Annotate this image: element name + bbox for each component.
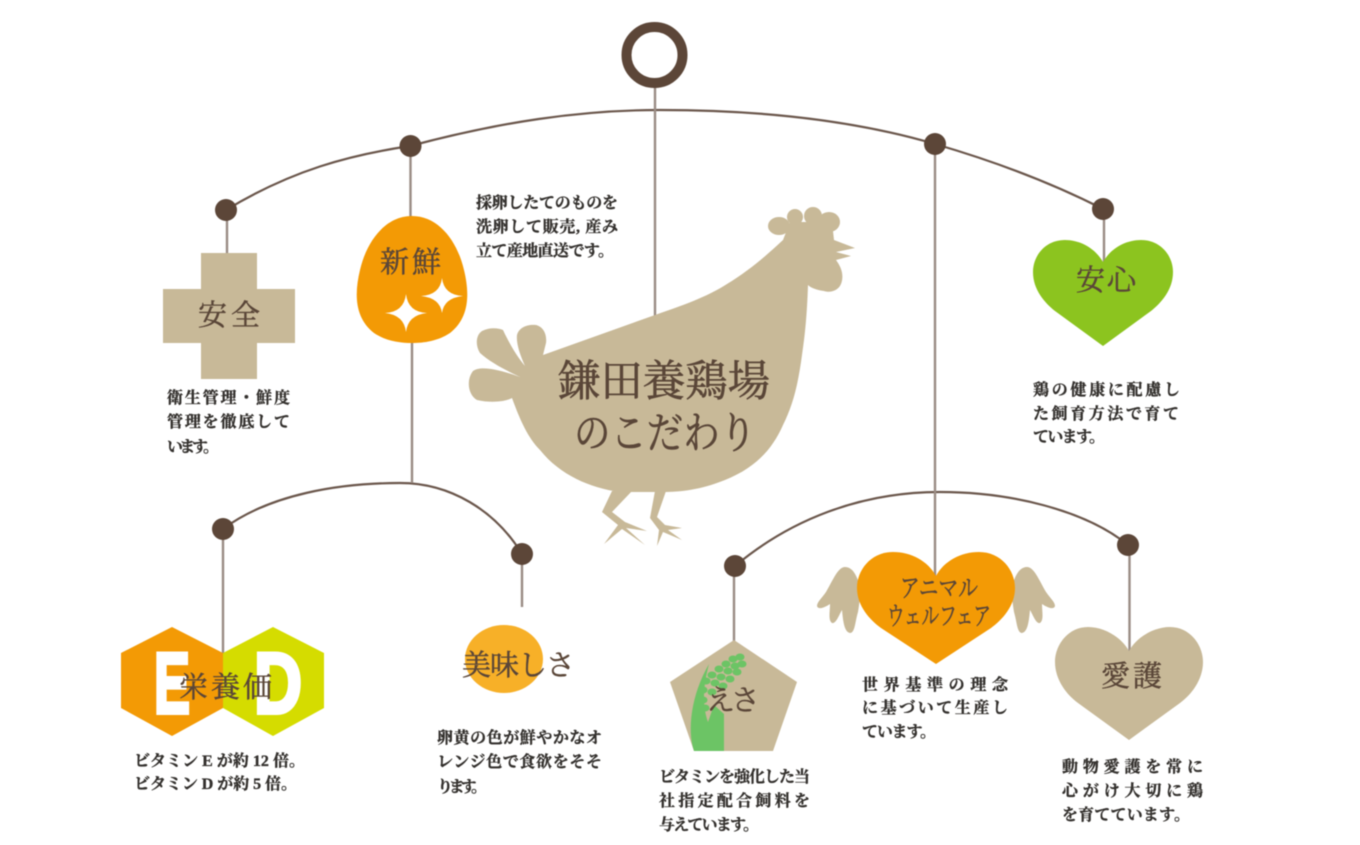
taste description [437, 728, 602, 796]
welfare label: ウェルフェア [887, 602, 991, 631]
welfare label: アニマル [900, 574, 978, 603]
freshness description [476, 193, 618, 260]
item: animal care heart [1055, 627, 1203, 824]
care description [1062, 757, 1203, 824]
freshness description: 立て産地直送です。 [476, 241, 614, 260]
feed description [659, 767, 810, 834]
welfare label [887, 574, 991, 631]
yellow circle [465, 625, 543, 693]
welfare description: に基づいて生産し [862, 698, 1008, 717]
wings [817, 567, 1055, 633]
safety label: 安全 [198, 299, 260, 332]
green heart [1033, 240, 1173, 346]
cross shape [163, 253, 295, 379]
chicken title: のこだわり [574, 411, 756, 458]
taste description: ります。 [437, 778, 487, 796]
feed description: 社指定配合飼料を [659, 791, 810, 810]
item: feed pentagon [659, 640, 810, 834]
pentagon [670, 640, 797, 751]
orange heart [857, 552, 1015, 664]
sparkles [385, 278, 463, 332]
welfare description [862, 675, 1009, 741]
egg shape [357, 216, 467, 343]
freshness description: 洗卵して販売, 産み [476, 217, 618, 236]
care description: 心がけ大切に鶏 [1062, 782, 1203, 800]
peace of mind description: 鶏の健康に配慮し [1033, 380, 1180, 399]
chicken silhouette [469, 207, 855, 546]
safety description: 管理を徹底して [167, 412, 290, 431]
care description: 動物愛護を常に [1062, 757, 1203, 776]
rice plant [691, 654, 746, 751]
orange hexagon [121, 627, 223, 736]
safety description: います。 [167, 438, 219, 456]
care description: を育てています。 [1062, 805, 1190, 824]
peace of mind label: 安心 [1076, 264, 1138, 297]
taste description: 卵黄の色が鮮やかなオ [437, 728, 602, 747]
item: animal welfare winged heart [817, 552, 1055, 741]
taste label: 美味しさ [462, 649, 575, 682]
letter D: D [254, 636, 302, 732]
safety description [167, 388, 290, 456]
nutrition label: 栄養価 [179, 671, 272, 704]
feed description: ビタミンを強化した当 [659, 767, 810, 786]
nutrition description [134, 752, 305, 793]
item: safety cross [163, 253, 295, 456]
taste description: レンジ色で食欲をそそ [437, 752, 602, 771]
peace of mind description [1033, 380, 1180, 446]
feed description: 与えています。 [659, 815, 759, 834]
item: peace of mind heart [1033, 240, 1180, 446]
item: taste circle [437, 625, 602, 796]
letter E: E [154, 636, 190, 732]
freshness label: 新鮮 [380, 246, 441, 279]
item: nutrition hexagons [121, 627, 324, 793]
welfare description: ています。 [862, 723, 936, 741]
care label: 愛護 [1101, 660, 1162, 693]
welfare description: 世界基準の理念 [862, 675, 1009, 694]
hanging ring [626, 27, 682, 83]
peace of mind description: た飼育方法で育て [1033, 404, 1179, 423]
chicken title [558, 359, 770, 458]
chicken title: 鎌田養鶏場 [558, 359, 770, 406]
nutrition description: ビタミン E が約 12 倍。 [134, 752, 305, 770]
central chicken with title [469, 207, 855, 546]
beige heart [1055, 627, 1203, 740]
mobile wires and joints [212, 84, 1139, 656]
yellow hexagon [223, 627, 324, 736]
peace of mind description: ています。 [1033, 428, 1105, 446]
nutrition description: ビタミン D が約 5 倍。 [134, 775, 297, 793]
item: freshness egg [357, 193, 618, 343]
feed label: えさ [706, 685, 760, 717]
safety description: 衛生管理・鮮度 [167, 388, 290, 407]
freshness description: 採卵したてのものを [476, 193, 618, 212]
